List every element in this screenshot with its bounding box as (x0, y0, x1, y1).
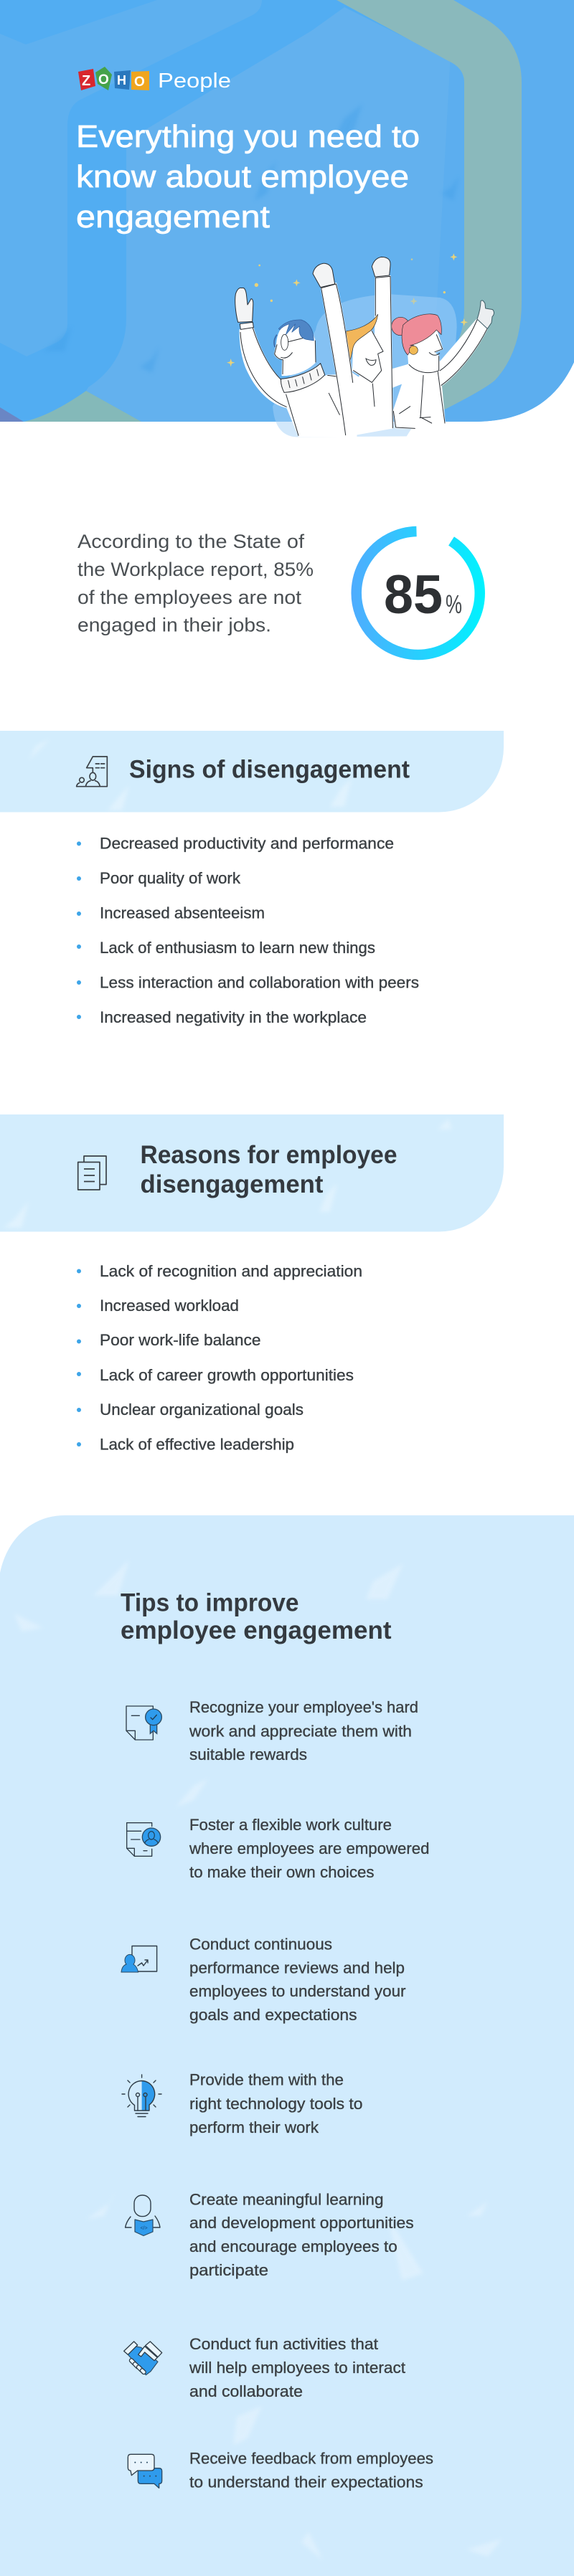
list: signs of disengagement: Less interaction and collaboration with peers (100, 974, 419, 991)
text: tip 7: to understand their expectations (189, 2473, 423, 2491)
text: tip 1 (189, 1698, 418, 1763)
heading: tips to improve employee engagement: Tips to improve (121, 1589, 298, 1616)
chart: 85 percent ring: 85 (384, 564, 443, 625)
panel: hero background (0, 0, 574, 430)
person: man with glasses (235, 288, 346, 436)
text: tip 2: Foster a flexible work culture (189, 1816, 392, 1834)
tip 4: technology tools (122, 2071, 363, 2136)
text block: state of the workplace statistic: engaged in their jobs. (77, 614, 271, 635)
text: tip 4: Provide them with the (189, 2071, 344, 2089)
text: tip 7: Receive feedback from employees (189, 2449, 433, 2467)
title: know about employee (76, 159, 409, 194)
text: tip 6: will help employees to interact (189, 2359, 406, 2377)
text: tip 3 (189, 1936, 406, 2024)
list: signs of disengagement: Increased absenteeism (100, 904, 265, 922)
list: signs of disengagement: Poor quality of work (100, 869, 241, 887)
text: tip 6: and collaborate (189, 2382, 303, 2400)
text: tip 6 (189, 2335, 406, 2400)
text: tip 5: participate (189, 2261, 268, 2279)
panel: reasons for disengagement header (0, 1114, 504, 1232)
icon: handshake (124, 2341, 162, 2375)
text: tip 5: and encourage employees to (189, 2238, 397, 2255)
text: tip 3: employees to understand your (189, 1982, 406, 2000)
logo: Zoho People: Z (82, 73, 90, 89)
list: reasons for disengagement: Poor work-life balance (100, 1331, 261, 1349)
logo: Zoho People: People (158, 70, 231, 93)
logo: Zoho People: O (98, 72, 109, 87)
title (76, 119, 420, 235)
text: tip 5 (189, 2190, 414, 2279)
tip 1: recognize hard work (126, 1698, 418, 1763)
list: signs of disengagement (77, 835, 419, 1026)
text: tip 2: to make their own choices (189, 1863, 375, 1881)
text: tip 3: Conduct continuous (189, 1936, 332, 1954)
list: reasons for disengagement: Lack of recognition and appreciation (100, 1262, 362, 1280)
tip 5: learning opportunities (126, 2190, 414, 2279)
list: signs of disengagement: Increased negativity in the workplace (100, 1008, 367, 1026)
panel: signs of disengagement header (0, 731, 504, 812)
icon: person reading code book: </> (140, 2226, 148, 2231)
text: tip 1: suitable rewards (189, 1746, 307, 1763)
text: tip 2 (189, 1816, 429, 1881)
logo: Zoho People: O (134, 75, 145, 90)
person: man with orange hair and raised fists (313, 257, 392, 436)
tip 6: fun activities (124, 2335, 406, 2400)
icon: person presenting chart (121, 1946, 157, 1972)
icon: light bulb with circuit (122, 2075, 161, 2117)
title: engagement (76, 199, 270, 235)
list: signs of disengagement: Lack of enthusiasm to learn new things (100, 939, 375, 957)
text: tip 7 (189, 2449, 433, 2491)
tip 3: performance reviews (121, 1936, 406, 2024)
icon: gold sparkles (227, 253, 468, 366)
list: reasons for disengagement (77, 1262, 362, 1453)
text: tip 6: Conduct fun activities that (189, 2335, 379, 2353)
icon: building with people (77, 757, 107, 787)
heading: tips to improve employee engagement (121, 1589, 392, 1644)
panel: tips to improve employee engagement (0, 1515, 574, 2576)
icon: person reading code book (126, 2195, 160, 2236)
tip 2: flexible work culture (127, 1816, 429, 1881)
illustration: three cheering employees (227, 253, 494, 437)
list: reasons for disengagement: Unclear organizational goals (100, 1401, 304, 1419)
text: tip 4 (189, 2071, 363, 2136)
chart: 85 percent ring: % (446, 589, 462, 619)
text: tip 1: Recognize your employee's hard (189, 1698, 418, 1716)
text: tip 2: where employees are empowered (189, 1839, 429, 1857)
tip 7: receive feedback (128, 2449, 433, 2491)
text: tip 1: work and appreciate them with (189, 1722, 412, 1740)
icon: document with person badge (127, 1823, 161, 1856)
text: tip 3: performance reviews and help (189, 1959, 405, 1976)
text block: state of the workplace statistic: the Workplace report, 85% (77, 559, 314, 580)
list: signs of disengagement: Decreased productivity and performance (100, 835, 394, 853)
title: Everything you need to (76, 119, 420, 154)
heading: tips to improve employee engagement: employee engagement (121, 1616, 392, 1644)
text block: state of the workplace statistic: of the employees are not (77, 587, 302, 608)
text block: state of the workplace statistic (77, 531, 314, 635)
heading: signs of disengagement: Signs of disengagement (129, 756, 410, 783)
list: reasons for disengagement: Lack of effective leadership (100, 1436, 294, 1453)
person: woman with pink hair (392, 300, 494, 428)
heading: reasons for employee disengagement (141, 1141, 397, 1198)
list: reasons for disengagement: Lack of career growth opportunities (100, 1366, 354, 1384)
icon: stacked documents (78, 1156, 106, 1190)
text: tip 4: perform their work (189, 2118, 319, 2136)
logo: Zoho People (78, 67, 231, 93)
logo: Zoho People: H (117, 73, 126, 87)
text block: state of the workplace statistic: According to the State of (77, 531, 305, 552)
text: tip 5: and development opportunities (189, 2214, 414, 2232)
text: tip 5: Create meaningful learning (189, 2190, 383, 2209)
chart: 85 percent ring (357, 531, 480, 655)
icon: chat bubbles (128, 2454, 162, 2488)
text: tip 3: goals and expectations (189, 2006, 357, 2024)
heading: reasons for employee disengagement: disengagement (141, 1170, 324, 1198)
heading: reasons for employee disengagement: Reasons for employee (141, 1141, 397, 1169)
list: reasons for disengagement: Increased workload (100, 1297, 239, 1315)
text: tip 4: right technology tools to (189, 2095, 363, 2113)
icon: certificate with seal (126, 1706, 161, 1740)
